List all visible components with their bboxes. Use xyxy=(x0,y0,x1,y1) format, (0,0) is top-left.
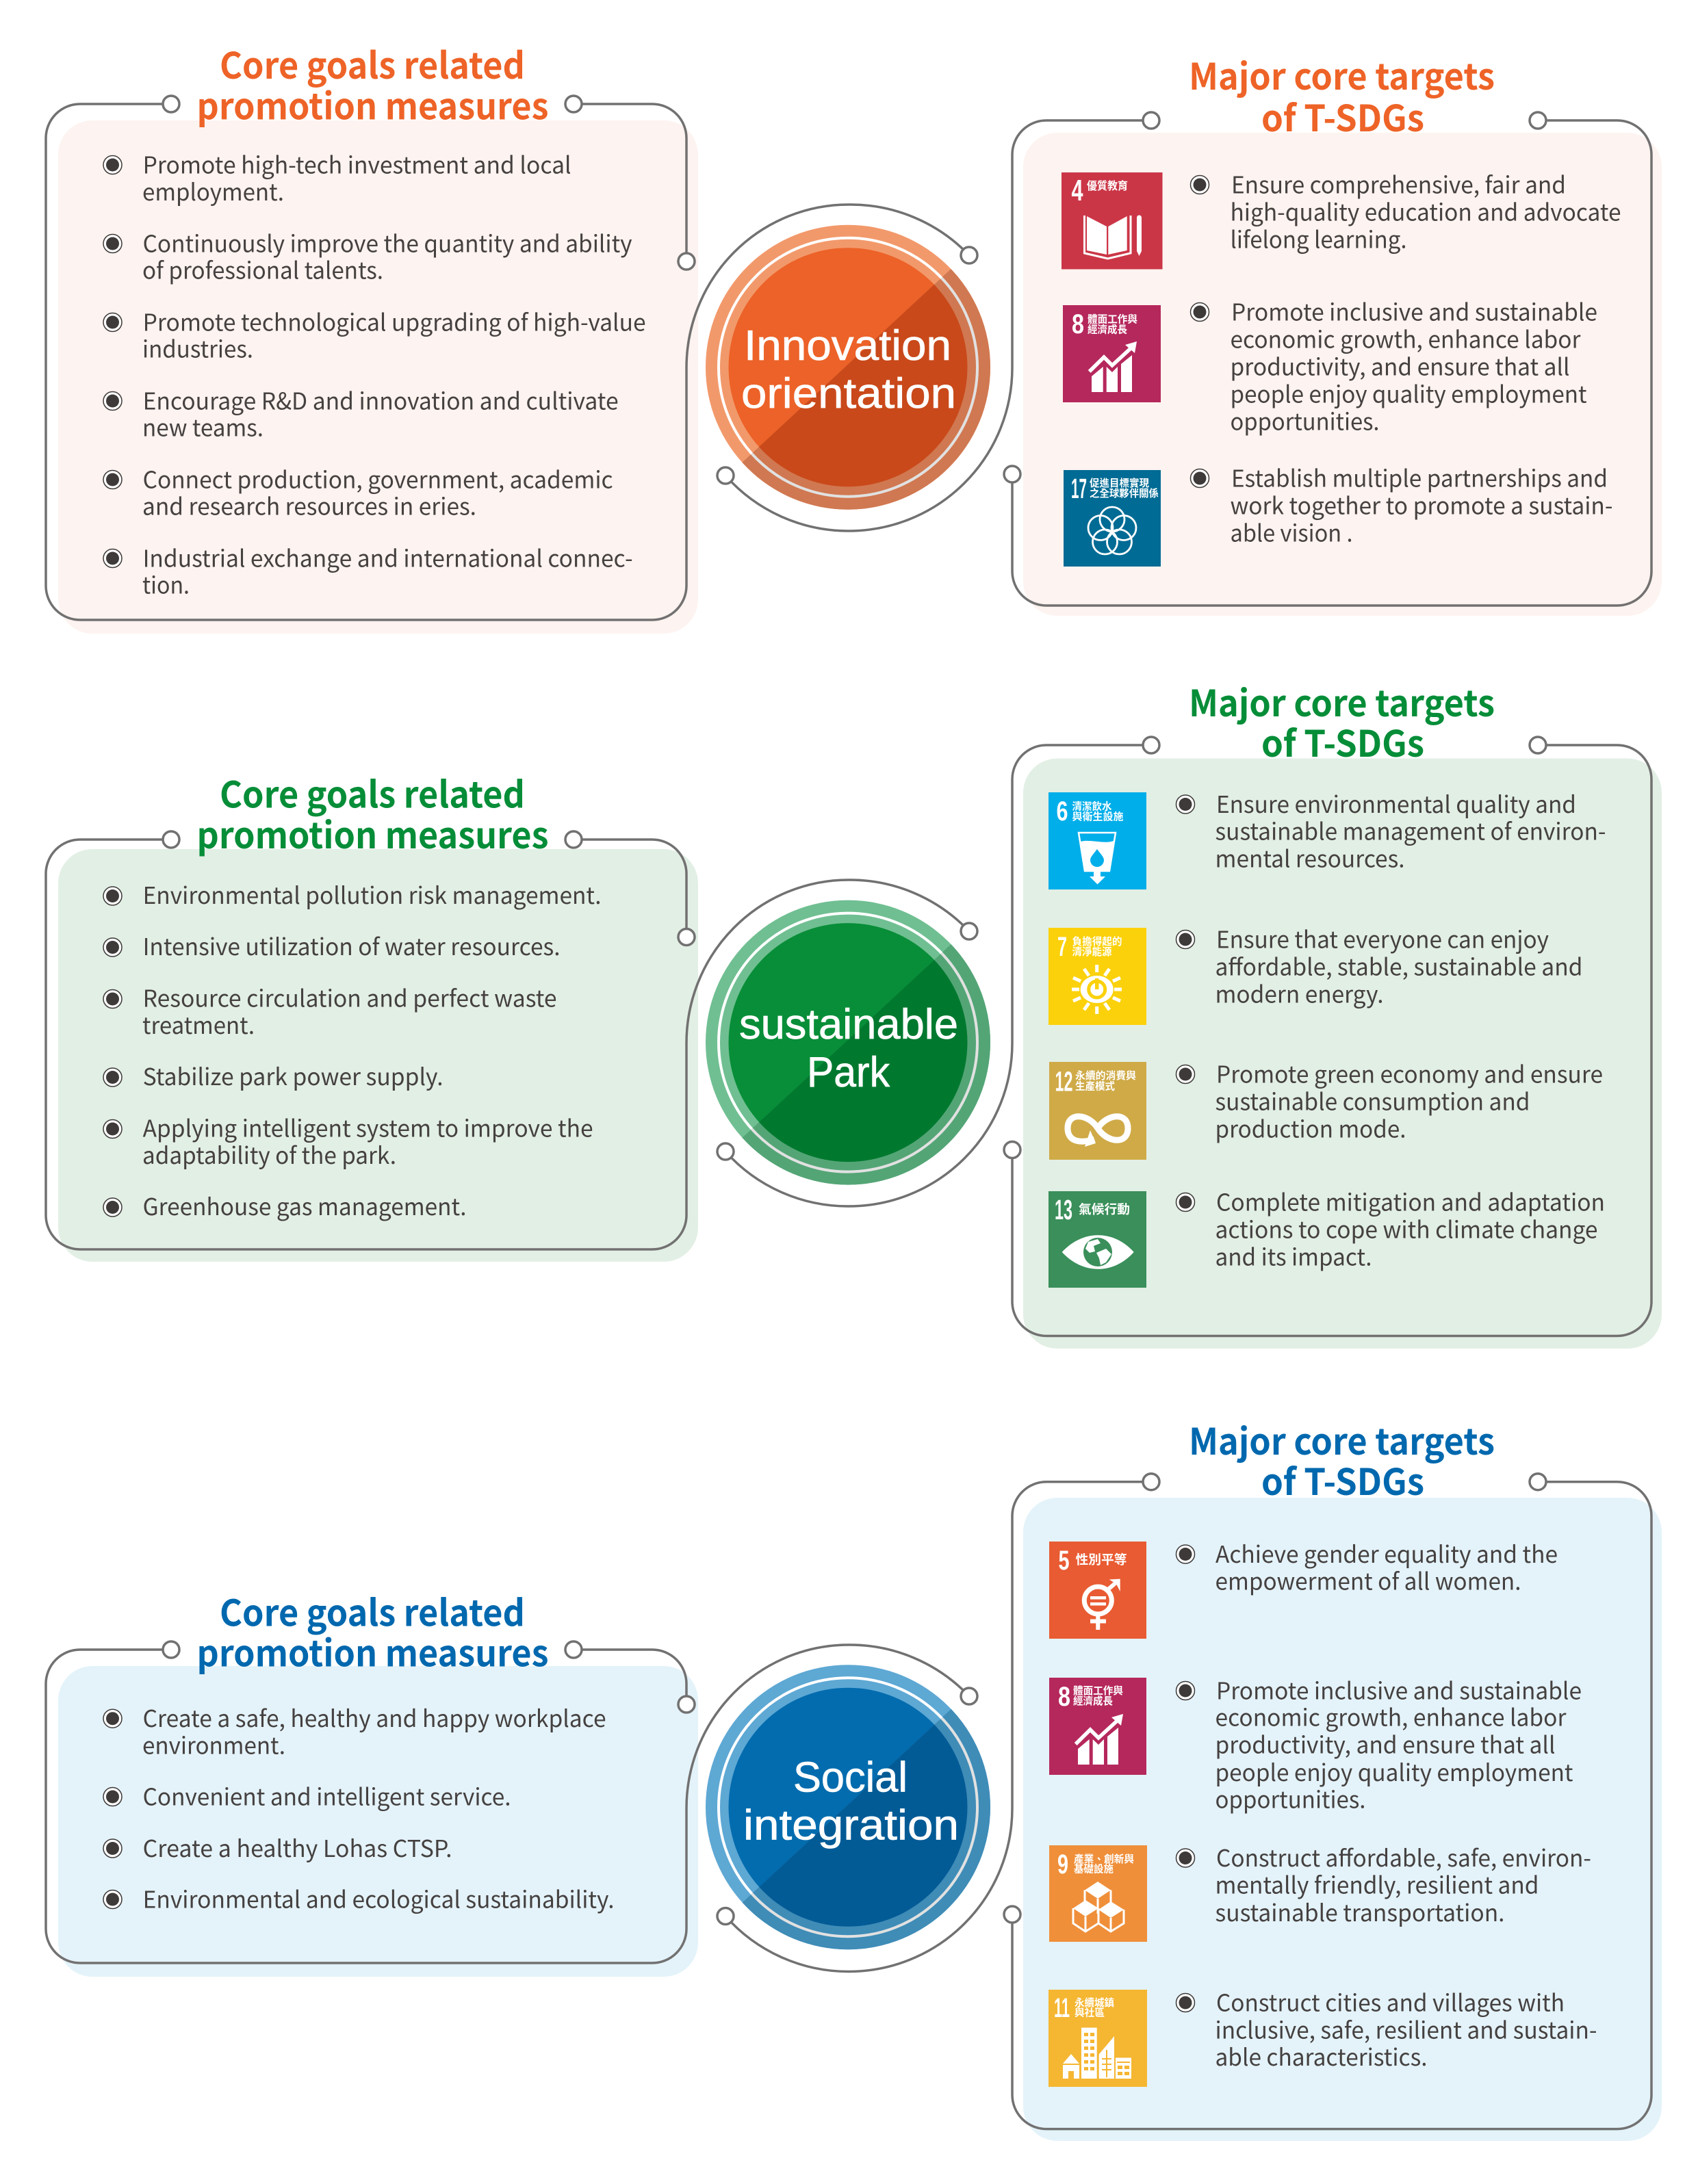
icon: SDG 13 climate action xyxy=(1049,1191,1146,1288)
circle badge: sustainable park: Park xyxy=(807,1049,890,1096)
bullet item xyxy=(1176,1536,1558,1597)
connector nodes xyxy=(163,96,1546,484)
icon: SDG 17 partnerships: 之全球夥伴關係 xyxy=(1090,487,1159,499)
section: sustainable park xyxy=(46,675,1662,1349)
heading: major targets xyxy=(1189,675,1495,768)
connector: core goals outline and arc xyxy=(46,840,969,1249)
bullet item: and its impact. xyxy=(1215,1238,1372,1273)
icon: SDG 4 quality education xyxy=(1062,172,1162,270)
icon: SDG 9 industry and innovation: 產業、創新與 xyxy=(1074,1853,1134,1865)
icon: SDG 8 decent work: 8 xyxy=(1058,1682,1070,1712)
icon: SDG 9 industry and innovation: 9 xyxy=(1057,1849,1068,1880)
bullet item: Environmental and ecological sustainability. xyxy=(143,1882,615,1914)
icon: SDG 9 industry and innovation: 基礎設施 xyxy=(1074,1862,1114,1875)
bullet item: employment. xyxy=(142,174,284,207)
bullet item xyxy=(1176,786,1606,874)
bullet item xyxy=(103,304,646,364)
bullet item xyxy=(1191,294,1597,437)
bullet item: Greenhouse gas management. xyxy=(143,1188,467,1222)
bullet item: Ensure comprehensive, fair and xyxy=(1231,167,1566,200)
connector: core goals outline and arc xyxy=(46,104,969,620)
bullet item: Resource circulation and perfect waste xyxy=(143,980,557,1014)
circle badge: sustainable park xyxy=(706,900,990,1185)
bullet item: inclusive, safe, resilient and sustain- xyxy=(1215,2012,1597,2046)
icon: SDG 7 clean energy xyxy=(1049,928,1146,1025)
bullet item xyxy=(103,226,632,286)
bullet item: sustainable transportation. xyxy=(1215,1895,1504,1928)
bullet item: Promote high-tech investment and local xyxy=(143,146,571,181)
bullet item: affordable, stable, sustainable and xyxy=(1215,948,1582,983)
bullet item xyxy=(103,146,571,207)
heading: major targets: Major core targets xyxy=(1189,1414,1495,1466)
bullet item: tion. xyxy=(142,567,190,601)
icon: SDG 8 decent work xyxy=(1063,305,1161,402)
icon: SDG 11 sustainable cities xyxy=(1049,1990,1147,2087)
icon: SDG 7 clean energy: 7 xyxy=(1057,932,1067,962)
heading: major targets xyxy=(1189,49,1495,142)
bullet item: mentally friendly, resilient and xyxy=(1215,1867,1539,1901)
icon: SDG 8 decent work: 體面工作與 xyxy=(1088,313,1137,326)
bullet item xyxy=(1176,921,1582,1010)
bullet item: Construct affordable, safe, environ- xyxy=(1216,1840,1591,1873)
bullet item: Intensive utilization of water resources. xyxy=(143,928,561,962)
bullet item xyxy=(1176,1984,1597,2072)
bullet item: people enjoy quality employment xyxy=(1215,1754,1573,1788)
bullet item: Promote green economy and ensure xyxy=(1216,1056,1603,1089)
icon: SDG 13 climate action: 氣候行動 xyxy=(1079,1202,1130,1217)
connector: targets outline and arc xyxy=(725,120,1151,531)
icon: SDG 5 gender equality: 性別平等 xyxy=(1076,1552,1127,1567)
circle badge: sustainable park: sustainable xyxy=(739,1001,958,1048)
heading: core goals: promotion measures xyxy=(197,1626,549,1678)
connector: targets outline lower xyxy=(1012,745,1651,1336)
bullet item: Environmental pollution risk management. xyxy=(143,877,602,911)
icon: SDG 7 clean energy: 負擔得起的 xyxy=(1072,935,1122,948)
icon: SDG 17 partnerships xyxy=(1064,470,1161,567)
heading: core goals xyxy=(197,766,549,859)
heading: core goals xyxy=(197,1585,549,1678)
bullet item xyxy=(1191,167,1621,255)
bullet item: environment. xyxy=(142,1727,285,1761)
bullet item: mental resources. xyxy=(1215,840,1404,874)
bullet item: economic growth, enhance labor xyxy=(1215,1700,1567,1732)
bullet item: empowerment of all women. xyxy=(1215,1563,1521,1597)
circle badge: innovation orientation: Innovation xyxy=(744,322,951,369)
bullet item: Continuously improve the quantity and ability xyxy=(143,226,632,259)
bullet item: new teams. xyxy=(142,409,263,443)
bullet item: productivity, and ensure that all xyxy=(1231,349,1570,382)
bullet item: of professional talents. xyxy=(142,252,383,286)
bullet item: Construct cities and villages with xyxy=(1216,1984,1565,2018)
bullet item: Create a safe, healthy and happy workplace xyxy=(143,1700,606,1734)
bullet item: Promote inclusive and sustainable xyxy=(1231,294,1597,327)
connector: targets outline lower xyxy=(1012,120,1651,606)
connector: targets outline and arc xyxy=(725,1482,1151,1972)
icon: SDG 5 gender equality xyxy=(1049,1542,1146,1639)
circle badge: social integration: Social xyxy=(793,1754,908,1802)
bullet item xyxy=(103,1700,606,1761)
bullet item: treatment. xyxy=(142,1007,255,1041)
panel: major targets background xyxy=(1023,133,1662,616)
list: major targets xyxy=(1176,786,1606,1273)
bullet item: productivity, and ensure that all xyxy=(1215,1727,1555,1760)
icon: SDG 17 partnerships: 17 xyxy=(1071,473,1087,504)
connector: targets outline lower xyxy=(1012,1482,1651,2129)
heading: major targets xyxy=(1189,1414,1495,1506)
bullet item xyxy=(103,980,557,1041)
bullet item: Promote technological upgrading of high-value xyxy=(143,304,646,338)
heading: major targets: of T-SDGs xyxy=(1261,90,1424,142)
bullet item xyxy=(103,383,619,443)
bullet item: Ensure environmental quality and xyxy=(1216,786,1576,820)
bullet item: Industrial exchange and international connec- xyxy=(143,541,633,573)
heading: core goals: Core goals related xyxy=(220,766,525,818)
icon: SDG 5 gender equality: 5 xyxy=(1058,1546,1069,1576)
bullet item xyxy=(1176,1056,1603,1144)
bullet item: Establish multiple partnerships and xyxy=(1231,460,1608,494)
bullet item: Convenient and intelligent service. xyxy=(143,1779,511,1812)
bullet item xyxy=(103,461,613,521)
list: major targets xyxy=(1191,167,1621,549)
icon: SDG 8 decent work: 經濟成長 xyxy=(1088,323,1127,335)
bullet item: high-quality education and advocate xyxy=(1231,194,1621,227)
icon: SDG 8 decent work xyxy=(1049,1678,1146,1775)
heading: major targets: Major core targets xyxy=(1189,49,1495,101)
bullet item: Promote inclusive and sustainable xyxy=(1216,1672,1582,1706)
circle badge: innovation orientation xyxy=(706,225,990,510)
bullet item: adaptability of the park. xyxy=(142,1137,396,1171)
icon: SDG 11 sustainable cities: 永續城鎮 xyxy=(1075,1997,1114,2009)
bullet item: economic growth, enhance labor xyxy=(1231,322,1581,354)
connector: core goals top right outline xyxy=(574,104,686,261)
list: core goals measures xyxy=(103,146,646,601)
bullet item xyxy=(1176,1184,1605,1273)
panel: core goals background xyxy=(58,1666,698,1977)
icon: SDG 6 clean water: 清潔飲水 xyxy=(1072,801,1111,813)
icon: SDG 11 sustainable cities: 11 xyxy=(1054,1993,1070,2023)
connector: core goals outline and arc xyxy=(46,1645,969,1963)
panel: core goals background xyxy=(58,120,698,634)
list: core goals measures xyxy=(103,1700,615,1914)
circle badge: social integration: integration xyxy=(743,1802,959,1849)
bullet item xyxy=(1191,460,1612,549)
bullet item: Complete mitigation and adaptation xyxy=(1216,1184,1605,1218)
bullet item: Stabilize park power supply. xyxy=(143,1058,443,1092)
bullet item: able characteristics. xyxy=(1215,2039,1428,2072)
bullet item: sustainable consumption and xyxy=(1215,1084,1530,1117)
bullet item: able vision . xyxy=(1231,515,1352,549)
icon: SDG 4 quality education: 4 xyxy=(1072,174,1083,207)
bullet item xyxy=(1176,1672,1582,1815)
panel: major targets background xyxy=(1023,1498,1662,2141)
icon: SDG 12 responsible consumption: 永續的消費與 xyxy=(1075,1069,1136,1082)
bullet item: and research resources in eries. xyxy=(142,489,476,521)
heading: major targets: of T-SDGs xyxy=(1261,716,1424,768)
circle badge: innovation orientation: orientation xyxy=(741,370,956,417)
bullet item: lifelong learning. xyxy=(1231,222,1407,255)
icon: SDG 17 partnerships: 促進目標實現 xyxy=(1090,477,1149,489)
bullet item: Encourage R&D and innovation and cultivate xyxy=(143,383,619,416)
heading: core goals: promotion measures xyxy=(197,78,549,130)
bullet item xyxy=(1176,1840,1591,1928)
bullet item: modern energy. xyxy=(1215,976,1384,1010)
icon: SDG 12 responsible consumption xyxy=(1049,1062,1146,1160)
connector: targets outline and arc xyxy=(725,745,1151,1206)
bullet item: industries. xyxy=(142,331,253,364)
bullet item: Create a healthy Lohas CTSP. xyxy=(143,1830,452,1864)
circle badge: social integration xyxy=(706,1665,990,1949)
heading: core goals: Core goals related xyxy=(220,1585,525,1637)
icon: SDG 12 responsible consumption: 12 xyxy=(1055,1066,1073,1097)
icon: SDG 8 decent work: 體面工作與 xyxy=(1073,1685,1123,1697)
heading: core goals xyxy=(197,38,549,130)
icon: SDG 13 climate action: 13 xyxy=(1055,1194,1072,1225)
icon: SDG 12 responsible consumption: 生產模式 xyxy=(1075,1080,1115,1092)
bullet item xyxy=(103,541,633,601)
icon: SDG 11 sustainable cities: 與社區 xyxy=(1075,2006,1105,2018)
icon: SDG 8 decent work: 8 xyxy=(1072,309,1084,339)
heading: core goals: promotion measures xyxy=(197,807,549,859)
heading: major targets: Major core targets xyxy=(1189,675,1495,727)
section: social integration xyxy=(46,1414,1662,2141)
panel: core goals background xyxy=(58,849,698,1262)
connector nodes xyxy=(163,737,1546,1160)
icon: SDG 6 clean water: 6 xyxy=(1057,796,1068,827)
heading: core goals: Core goals related xyxy=(220,38,525,90)
icon: SDG 6 clean water xyxy=(1049,792,1146,889)
bullet item: Applying intelligent system to improve the xyxy=(143,1110,593,1144)
panel: major targets background xyxy=(1023,758,1662,1349)
bullet item: opportunities. xyxy=(1215,1782,1366,1815)
icon: SDG 9 industry and innovation xyxy=(1049,1845,1147,1942)
bullet item: Ensure that everyone can enjoy xyxy=(1216,921,1549,955)
bullet item: opportunities. xyxy=(1231,404,1380,437)
connector: core goals top right outline xyxy=(574,840,686,937)
bullet item: people enjoy quality employment xyxy=(1231,376,1587,409)
bullet item: sustainable management of environ- xyxy=(1215,813,1606,847)
icon: SDG 8 decent work: 經濟成長 xyxy=(1073,1695,1113,1707)
connector nodes xyxy=(163,1474,1546,1924)
list: core goals measures xyxy=(103,877,602,1222)
bullet item: work together to promote a sustain- xyxy=(1231,487,1612,521)
heading: major targets: of T-SDGs xyxy=(1261,1454,1424,1506)
icon: SDG 6 clean water: 與衛生設施 xyxy=(1072,810,1124,822)
bullet item xyxy=(103,1110,593,1171)
bullet item: production mode. xyxy=(1215,1111,1406,1144)
section: innovation orientation xyxy=(46,38,1662,634)
bullet item: Achieve gender equality and the xyxy=(1215,1536,1558,1570)
icon: SDG 4 quality education: 優質教育 xyxy=(1087,179,1128,192)
connector: core goals top right outline xyxy=(574,1650,686,1704)
bullet item: actions to cope with climate change xyxy=(1215,1211,1597,1245)
list: major targets xyxy=(1176,1536,1597,2072)
icon: SDG 7 clean energy: 清淨能源 xyxy=(1072,946,1111,958)
bullet item: Connect production, government, academic xyxy=(143,461,613,495)
